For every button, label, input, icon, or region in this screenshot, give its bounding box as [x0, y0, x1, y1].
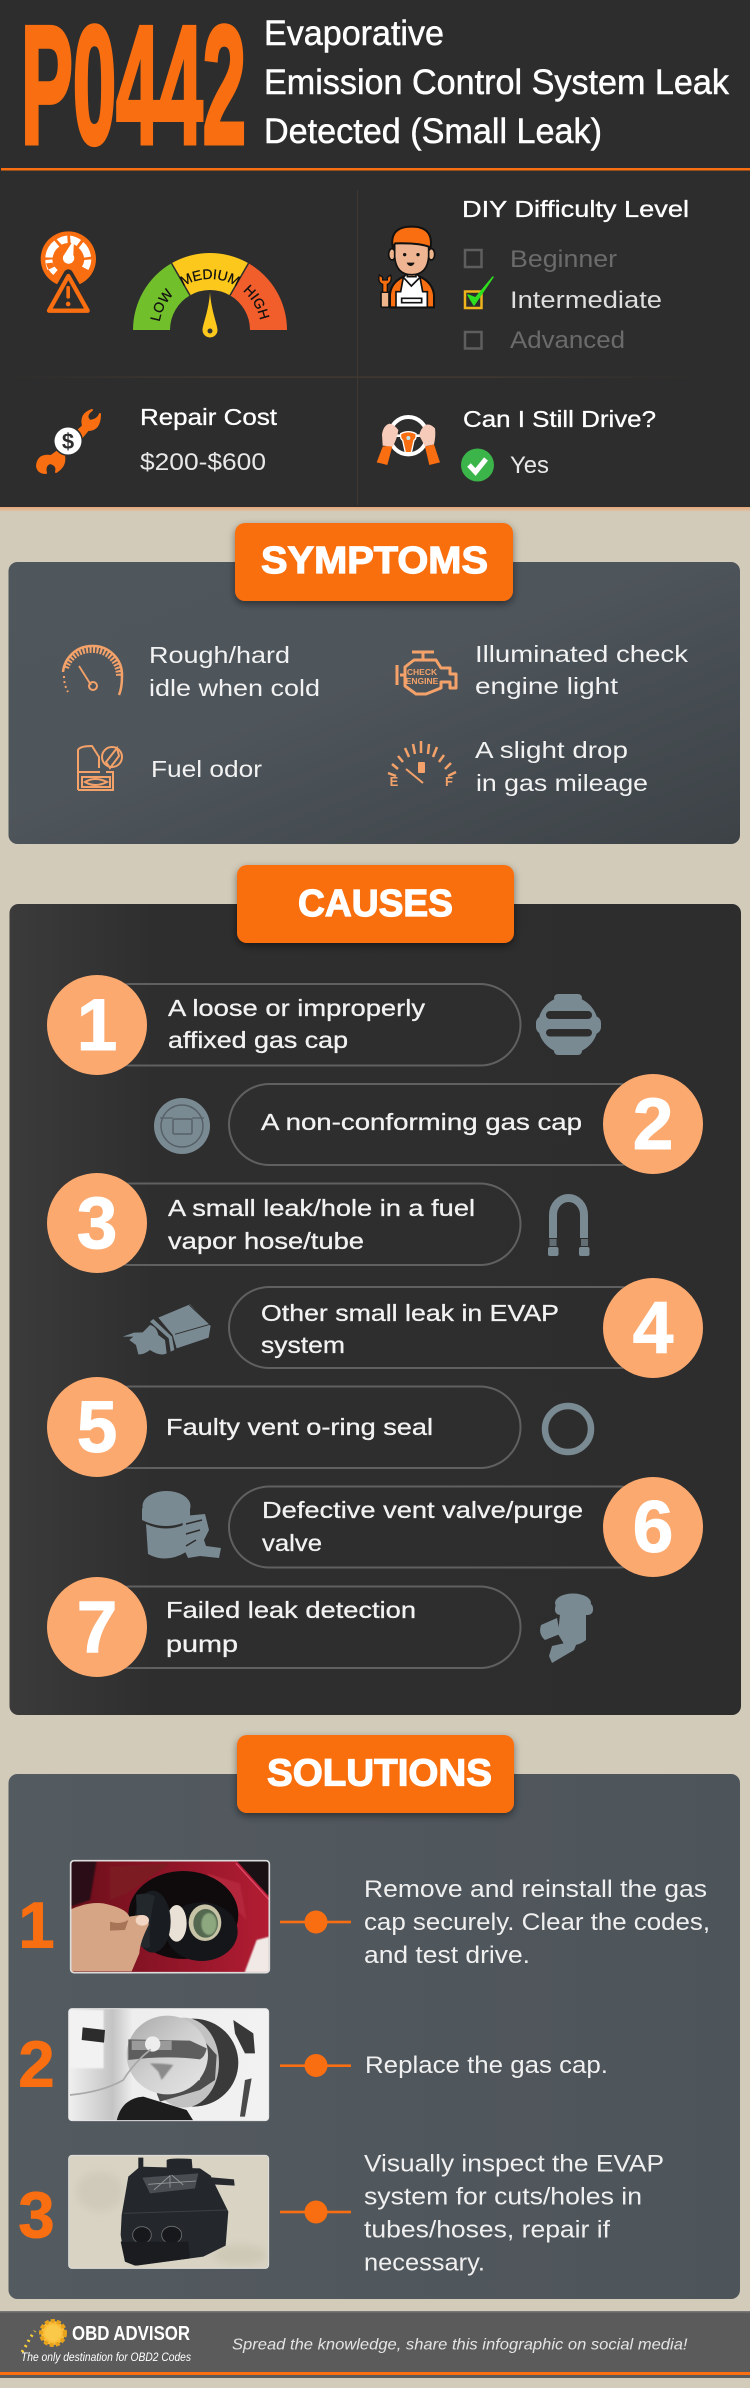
- solution text 2: Replace the gas cap.: [365, 2052, 608, 2079]
- icon: check engine: CHECK: [407, 667, 438, 677]
- icon: wrench with dollar: $: [62, 429, 74, 454]
- symptom: fuel odor: Fuel odor: [151, 756, 262, 782]
- cause 6: Defective vent valve/purge: [262, 1497, 583, 1523]
- cause 7: Failed leak detection: [166, 1597, 416, 1623]
- solution 2: [18, 2009, 608, 2121]
- solution 1: [18, 1861, 710, 1973]
- gauge: difficulty meter: [133, 253, 287, 338]
- symptom: gas mileage: A slight drop: [475, 737, 628, 763]
- cause 3: [47, 1173, 590, 1273]
- code description: Emission Control System Leak: [264, 62, 729, 102]
- panel: symptoms: [8, 523, 740, 844]
- panel: solutions: [8, 1735, 740, 2299]
- symptom: gas mileage: in gas mileage: [476, 770, 648, 796]
- icon: leak detection pump: [540, 1594, 593, 1663]
- cause 4: 4: [633, 1288, 674, 1369]
- cause 7: 7: [77, 1587, 117, 1668]
- symptom: rough idle: idle when cold: [149, 675, 320, 701]
- icon: vapor hose: [548, 1198, 590, 1256]
- icon: steering wheel and hands: [377, 417, 440, 465]
- difficulty checklist: Advanced: [510, 327, 625, 354]
- can I still drive: Yes: [510, 452, 549, 479]
- cause 1: A loose or improperly: [168, 995, 426, 1021]
- solution text 3: Visually inspect the EVAP: [364, 2150, 664, 2178]
- logo: OBD Advisor: OBD ADVISOR: [72, 2323, 190, 2345]
- panel: header: [0, 0, 750, 512]
- photo: EVAP canister: [69, 2155, 269, 2268]
- causes heading tab: [237, 865, 514, 943]
- solutions heading tab: [237, 1735, 514, 1813]
- footer: [0, 2311, 750, 2378]
- solutions heading tab: SOLUTIONS: [267, 1752, 492, 1794]
- cause 1: 1: [77, 985, 117, 1066]
- cause 7: [47, 1577, 593, 1677]
- solution text 1: and test drive.: [364, 1942, 530, 1969]
- solution text 3: [364, 2150, 664, 2276]
- causes heading tab: CAUSES: [298, 883, 453, 925]
- symptom: check engine light: [475, 641, 689, 699]
- symptom: check engine light: Illuminated check: [475, 641, 689, 667]
- solution 3: [18, 2150, 664, 2276]
- cause 6: 6: [633, 1487, 673, 1568]
- cause 5: 5: [77, 1387, 117, 1468]
- icon: charcoal canister: [123, 1304, 211, 1354]
- symptoms heading tab: SYMPTOMS: [261, 540, 488, 582]
- cause 6: valve: [262, 1530, 322, 1556]
- gauge: difficulty meter: HIGH: [244, 284, 270, 320]
- gauge: difficulty meter: MEDIUM: [180, 269, 240, 286]
- solution text 3: necessary.: [364, 2250, 485, 2276]
- cause 4: Other small leak in EVAP: [261, 1300, 559, 1326]
- solution 2: 2: [18, 2028, 55, 2100]
- difficulty checklist: Beginner: [510, 246, 617, 273]
- difficulty checklist: [465, 246, 662, 354]
- symptom: gas mileage: [475, 737, 648, 796]
- symptom: check engine light: engine light: [475, 673, 619, 699]
- icon: fuel odor: [78, 746, 122, 790]
- icon: speedometer: [63, 646, 122, 695]
- code description: [264, 13, 729, 151]
- connector dot: [280, 2200, 351, 2224]
- icon: mechanic: [379, 227, 435, 307]
- logo: OBD Advisor: The only destination for OBD2 Codes: [21, 2352, 191, 2364]
- footer call to action: Spread the knowledge, share this infographic on social media!: [232, 2336, 688, 2354]
- logo: OBD Advisor: [21, 2321, 191, 2364]
- panel: causes: [10, 865, 741, 1715]
- connector dot: [280, 2054, 351, 2077]
- icon: check engine: ENGINE: [406, 676, 439, 686]
- cause 2: 2: [633, 1084, 673, 1165]
- icon: fuel gauge: [388, 741, 456, 789]
- DIY difficulty heading: DIY Difficulty Level: [462, 196, 689, 222]
- cause 3: vapor hose/tube: [168, 1228, 364, 1254]
- can I still drive: [461, 406, 656, 482]
- icon: fuel gauge: F: [445, 774, 453, 789]
- icon: fuel door: [154, 1098, 210, 1154]
- symptoms heading tab: [235, 523, 513, 601]
- cause 1: [47, 975, 601, 1075]
- icon: fuel gauge: E: [390, 774, 399, 789]
- icon: gas cap: [536, 994, 601, 1055]
- solution 1: 1: [18, 1888, 55, 1962]
- symptom: rough idle: [149, 642, 320, 701]
- icon: vent valve: [142, 1491, 221, 1559]
- solution text 3: system for cuts/holes in: [364, 2184, 642, 2210]
- cause 3: 3: [77, 1183, 117, 1264]
- cause 5: [47, 1377, 591, 1477]
- gauge: difficulty meter: LOW: [150, 288, 172, 321]
- difficulty checklist: Intermediate: [510, 287, 662, 314]
- cause 5: Faulty vent o-ring seal: [166, 1414, 433, 1440]
- photo: hand removing gas cap: [71, 1861, 269, 1973]
- cause 3: A small leak/hole in a fuel: [168, 1195, 475, 1221]
- solution text 3: tubes/hoses, repair if: [364, 2216, 610, 2244]
- cause 2: [154, 1074, 703, 1174]
- solution text 1: Remove and reinstall the gas: [364, 1876, 707, 1903]
- solution text 1: cap securely. Clear the codes,: [364, 1909, 710, 1936]
- solution 3: 3: [18, 2178, 55, 2252]
- cause 4: system: [261, 1332, 345, 1358]
- cause 7: pump: [166, 1631, 238, 1657]
- repair cost: Repair Cost: [140, 404, 278, 430]
- icon: gauge with warning triangle: [41, 231, 96, 311]
- repair cost: $200-$600: [140, 449, 266, 476]
- code description: Detected (Small Leak): [264, 111, 602, 151]
- cause 4: [123, 1278, 703, 1378]
- cause 6: [142, 1477, 703, 1577]
- can I still drive: Can I Still Drive?: [463, 406, 656, 432]
- icon: o-ring: [545, 1406, 591, 1452]
- connector dot: [280, 1910, 351, 1934]
- code description: Evaporative: [264, 13, 444, 53]
- symptom: rough idle: Rough/hard: [149, 642, 290, 668]
- icon: check engine: [397, 652, 456, 694]
- repair cost: [140, 404, 278, 476]
- icon: wrench with dollar: [37, 410, 100, 473]
- cause 2: A non-conforming gas cap: [261, 1109, 582, 1135]
- photo: gas cap: [69, 2009, 269, 2121]
- cause 1: affixed gas cap: [168, 1027, 348, 1053]
- solution text 1: [364, 1876, 710, 1969]
